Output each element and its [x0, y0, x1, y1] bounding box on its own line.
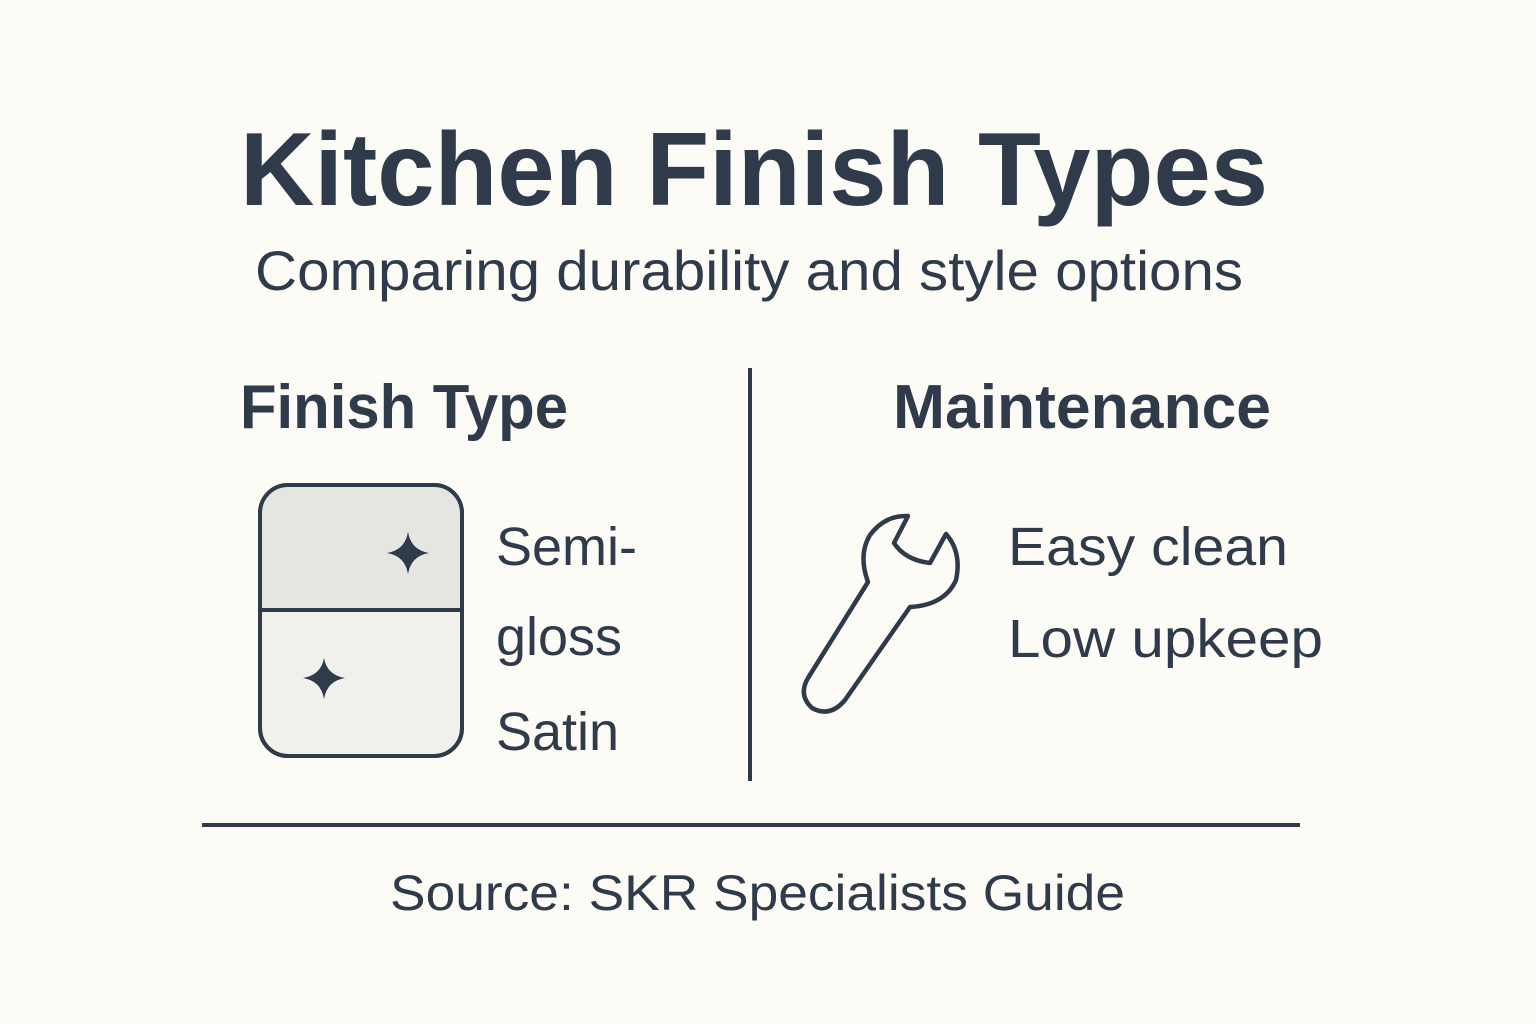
icon: wrench — [804, 516, 958, 712]
maintenance list: Easy clean — [1008, 517, 1288, 577]
finish type list: Semi- — [496, 517, 637, 577]
finish type list: gloss — [496, 607, 622, 667]
finish type list — [496, 517, 637, 762]
heading: finish type: Finish Type — [240, 373, 568, 442]
subtitle: Comparing durability and style options — [255, 239, 1243, 302]
title: Kitchen Finish Types — [240, 112, 1268, 228]
icon: finish swatch — [260, 485, 462, 756]
heading: maintenance: Maintenance — [893, 373, 1271, 442]
finish type list: Satin — [496, 702, 619, 762]
source: Source: SKR Specialists Guide — [390, 865, 1125, 921]
maintenance list: Low upkeep — [1008, 609, 1323, 669]
maintenance list — [1008, 517, 1323, 669]
